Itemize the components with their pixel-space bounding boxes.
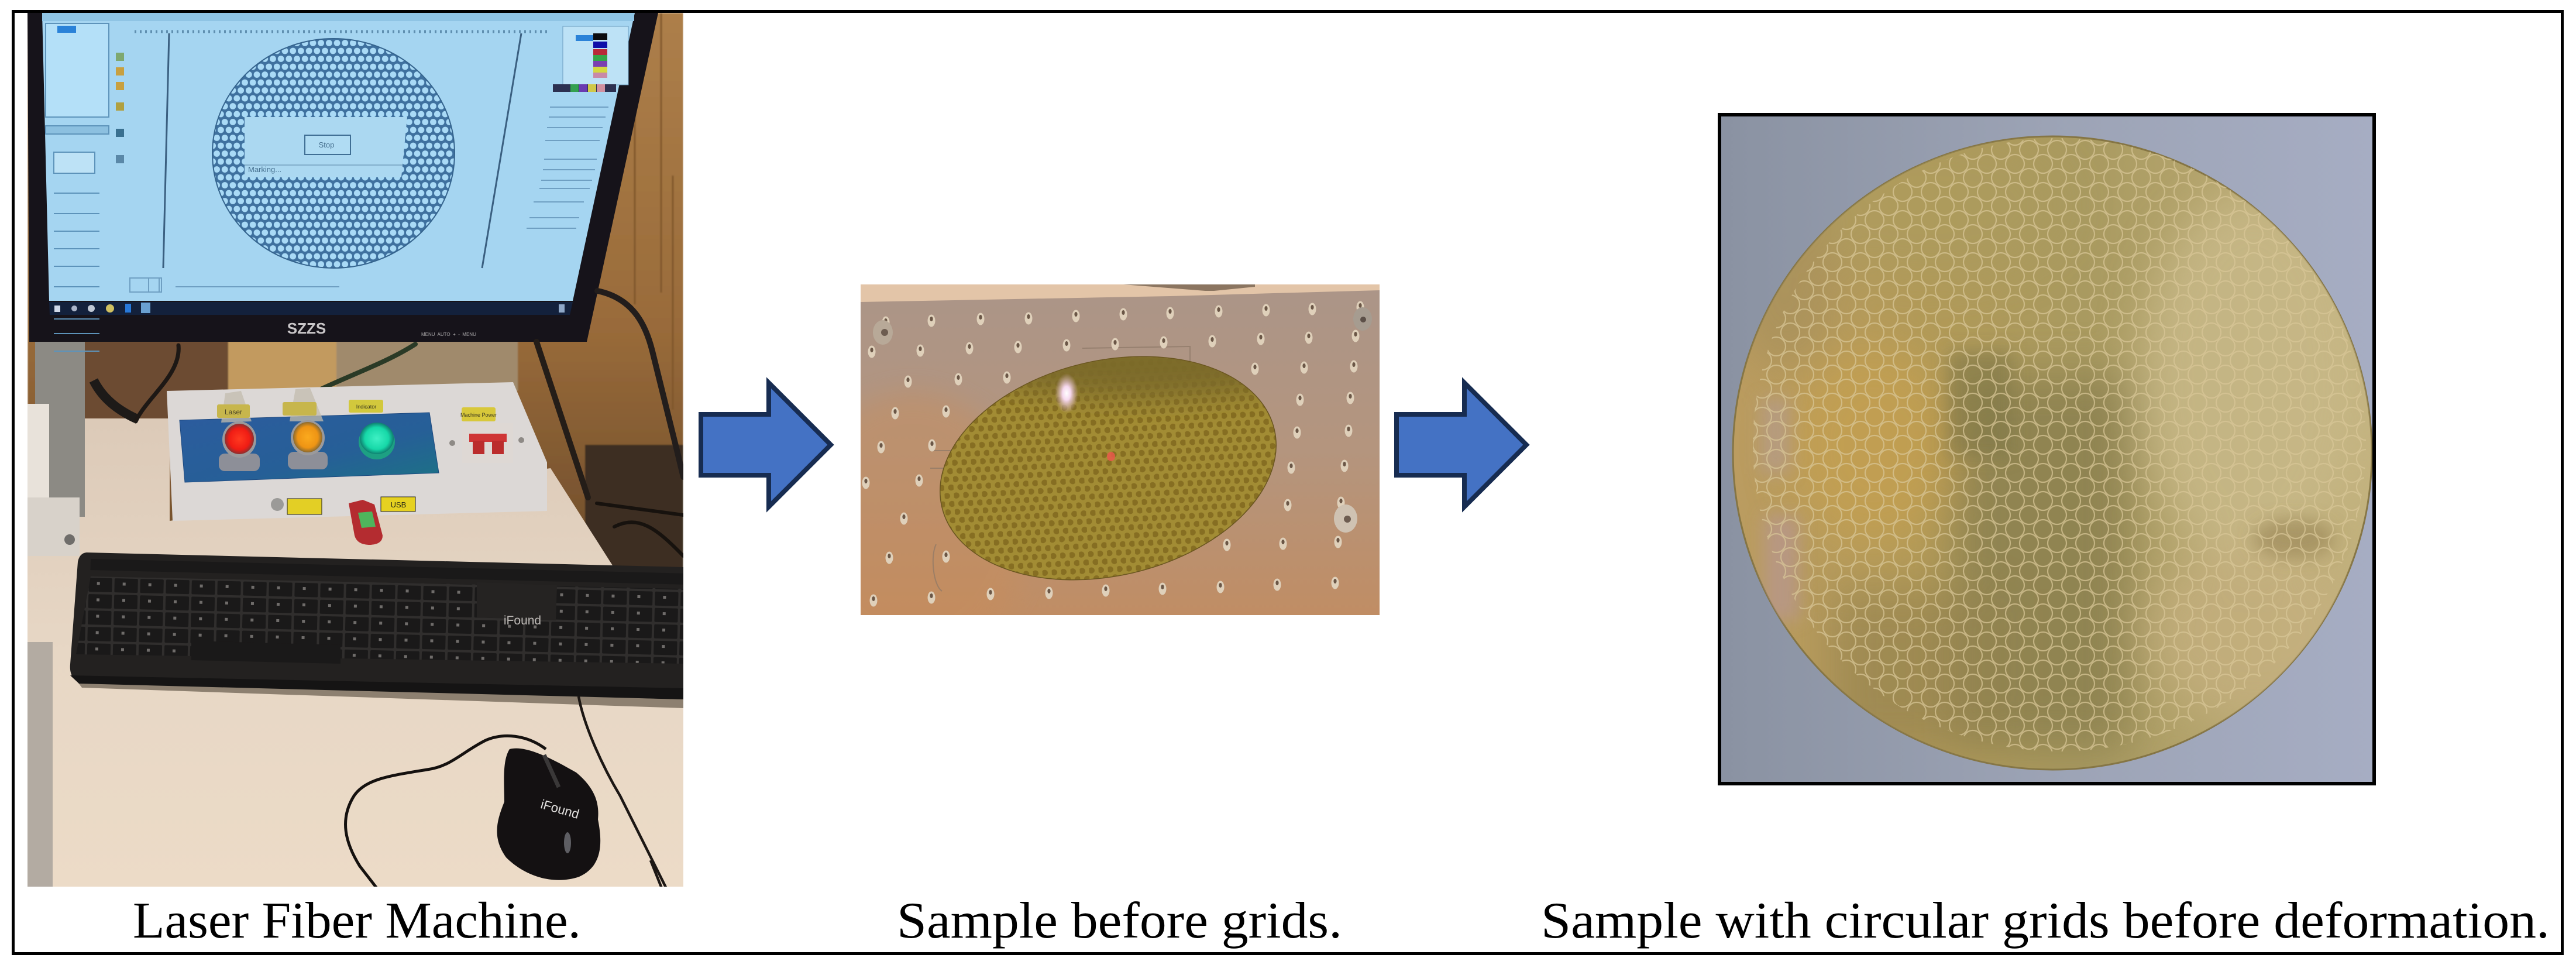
marking status: Marking... — [248, 165, 281, 174]
mounting screws — [873, 307, 1372, 533]
yellow label second lamp — [283, 402, 317, 416]
caption: laser fiber machine: Laser Fiber Machine. — [133, 893, 581, 949]
brass disc — [1733, 136, 2372, 770]
stop button — [305, 135, 350, 155]
keyboard lower lip — [70, 675, 683, 699]
keyboard brand: iFound — [504, 614, 541, 627]
red indicator light — [219, 421, 260, 471]
monitor — [27, 13, 658, 351]
ruler — [135, 30, 550, 33]
arrow: machine to sample — [701, 383, 831, 507]
laser glare — [1055, 373, 1078, 413]
stop button: Stop — [319, 140, 334, 149]
marking dialog — [245, 117, 407, 177]
pale top strip — [861, 284, 1380, 302]
keyboard — [70, 552, 683, 699]
yellow label machine power: Machine Power — [460, 412, 497, 418]
photo: sample with circular grids — [1719, 115, 2374, 784]
monitor bezel — [27, 13, 658, 342]
bottom software panel — [130, 278, 339, 292]
grid design on screen — [212, 39, 455, 268]
right software panel — [527, 26, 628, 228]
monitor buttons: MENU AUTO + - MENU — [421, 332, 476, 337]
yellow label indicator: Indicator — [356, 404, 376, 410]
key rows — [76, 576, 683, 664]
laser bed plate — [861, 284, 1380, 615]
photo border — [1719, 115, 2374, 784]
monitor screen — [42, 13, 635, 301]
engraved outline marks — [930, 346, 1190, 591]
circular grid pattern — [1753, 138, 2366, 751]
yellow label indicator — [349, 400, 383, 413]
tool column — [116, 53, 124, 163]
power breaker switch — [449, 423, 524, 463]
green indicator light — [359, 423, 395, 459]
laser control box — [167, 382, 547, 521]
mouse — [497, 749, 600, 880]
mouse brand: iFound — [539, 797, 581, 822]
work area guide lines — [163, 33, 521, 268]
keyboard cable — [579, 696, 667, 890]
left software panel — [46, 23, 109, 351]
control panel plate — [180, 413, 439, 482]
monitor brand: SZZS — [287, 320, 326, 337]
keyboard shadow — [73, 676, 683, 708]
mounting holes — [862, 301, 1364, 606]
machine column — [27, 341, 136, 556]
usb stick — [349, 500, 383, 545]
photo: sample before grids — [796, 284, 1380, 661]
warm lighting tint — [796, 392, 1030, 661]
orange indicator light — [288, 420, 328, 469]
brass sample disc — [918, 325, 1298, 611]
cables — [136, 291, 683, 556]
small knob and yellow label — [271, 498, 322, 514]
disc mottling and reflections — [1732, 129, 2364, 749]
red aiming dot — [1107, 452, 1115, 461]
windows taskbar — [49, 302, 573, 315]
wooden wall — [27, 13, 683, 586]
yellow label laser — [217, 404, 250, 418]
indicator guards — [221, 391, 252, 423]
software toolbar — [42, 13, 634, 21]
arrow: sample to grids — [1397, 383, 1526, 507]
spacebar — [191, 641, 341, 664]
yellow label laser: Laser — [225, 408, 242, 416]
laser marked grid in progress — [930, 334, 1316, 591]
tabletop — [27, 418, 683, 887]
gray strip — [27, 642, 53, 887]
photo background — [1721, 116, 2373, 782]
caption: sample before grids: Sample before grids. — [897, 893, 1342, 949]
nav cluster gap — [477, 582, 557, 620]
yellow label machine power — [460, 407, 497, 421]
dark wedge at top — [1123, 284, 1255, 291]
yellow label usb — [381, 497, 415, 512]
photo: laser fiber machine — [27, 13, 683, 890]
mouse cable — [346, 736, 546, 890]
caption: sample with circular grids: Sample with circular grids before deformation. — [1541, 893, 2550, 949]
yellow label usb: USB — [391, 500, 406, 509]
